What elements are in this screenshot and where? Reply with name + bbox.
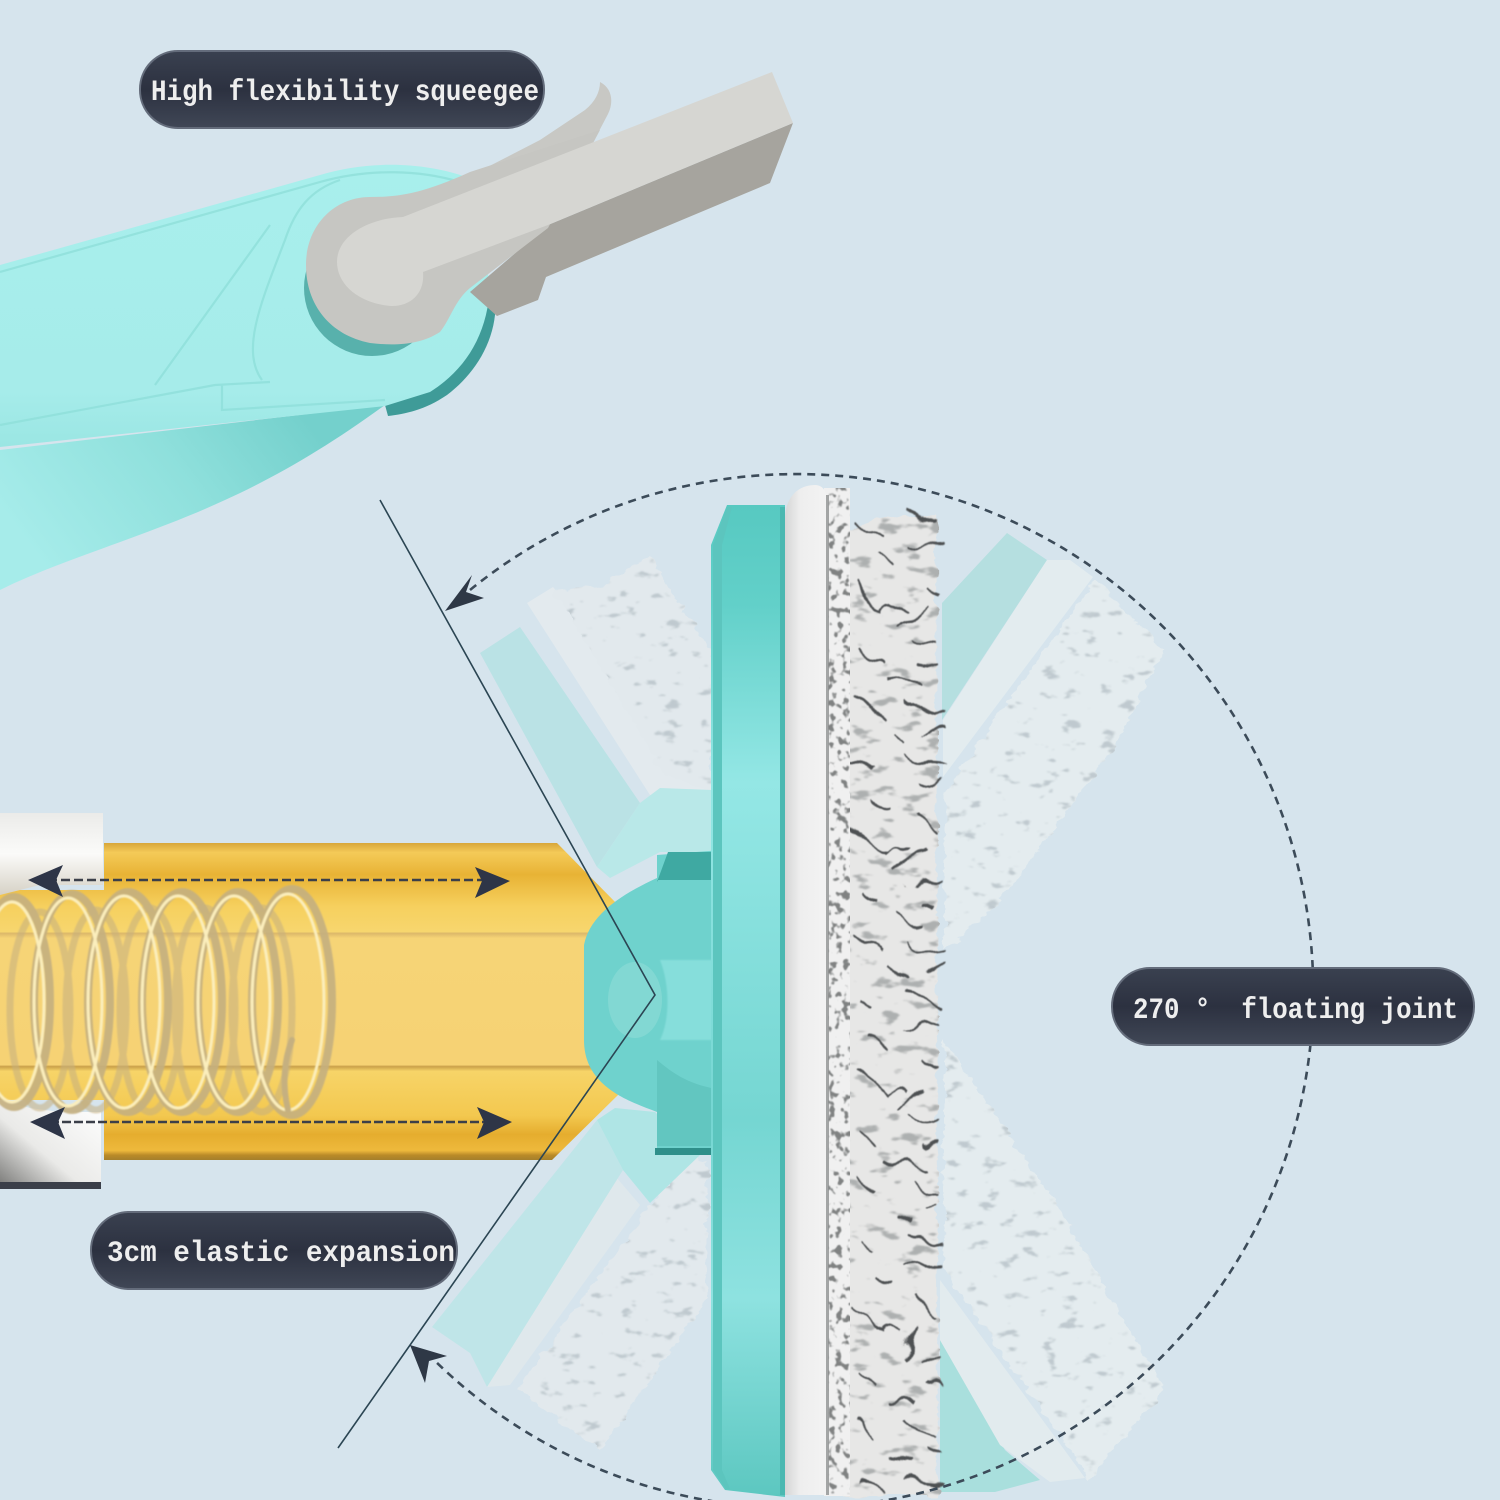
upper extension arrow [28,865,510,898]
white clamp blocks [0,813,103,1189]
plate edge shading [713,507,732,1489]
joint bracket top [657,852,722,882]
ghost mop upper left [480,556,712,878]
arrowhead upper arc [445,575,484,611]
handle dark rim [385,285,496,416]
microfibre stitched band [824,488,850,1496]
handle body [0,165,490,447]
swivel joint [584,850,722,1155]
lower extension arrow [30,1107,512,1139]
ghost mop upper right [942,533,1165,950]
ghost mop lower right [940,1040,1165,1492]
handle lower face [0,405,385,590]
squeegee blade side [470,123,793,316]
lower clamp [0,1100,101,1184]
squeegee handle illustration [0,72,793,590]
microfibre dark strands [848,510,942,1495]
label: high flexibility squeegee [140,51,544,128]
angle guide lines [338,500,655,1448]
teal mop plate [711,505,785,1497]
joint hollow [608,962,662,1038]
handle moulding lines [0,172,460,425]
label: 270 degree floating joint [1112,968,1474,1045]
mop white edge band [785,485,828,1495]
upper clamp [0,813,103,895]
squeegee blade top and inner bulb [337,72,793,306]
clamp shadow [0,1182,101,1189]
arrowhead lower arc [410,1345,447,1383]
microfibre fluff [845,515,938,1496]
faded rotated mop positions [432,533,1165,1492]
270 degree dashed arc [432,474,1313,1500]
label: 3cm elastic expansion: 3cm elastic expansion [107,1237,455,1271]
pivot base [304,220,440,356]
joint knob [584,850,722,1150]
telescopic yellow tube [0,843,618,1160]
mop head [711,485,942,1497]
label: high flexibility squeegee: High flexibility squeegee [151,76,539,110]
squeegee outer ring and arm [306,130,600,344]
squeegee rubber lip [470,82,611,185]
label: 3cm elastic expansion [91,1212,457,1289]
ghost mop lower left [432,1108,707,1450]
label: 270 degree floating joint: 270 ° floating joint [1133,994,1458,1028]
coil spring [0,889,332,1115]
joint bracket bottom [657,1060,722,1146]
